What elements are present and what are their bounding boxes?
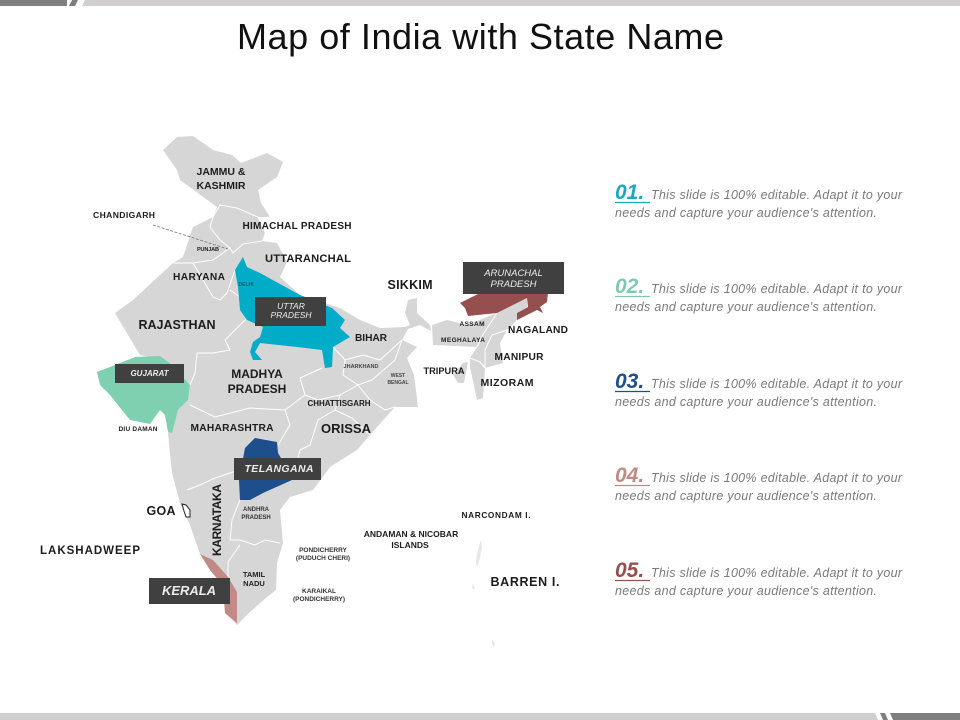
label: Diu Daman: DIU DAMAN [118,426,158,433]
map: Telangana highlighted [239,438,292,500]
label: Tripura: TRIPURA [424,366,465,376]
callout: Gujarat: GUJARAT [130,369,170,378]
text block 05: 05. [615,559,644,582]
Chandigarh leader line [153,225,228,249]
text block 05 [615,559,903,598]
label: Rajasthan: RAJASTHAN [138,318,216,332]
label: Jharkhand: JHARKHAND [344,364,379,370]
label: Karnataka: KARNATAKA [210,484,224,556]
text block 04 [615,464,903,503]
callout: Arunachal Pradesh: PRADESH [491,279,537,290]
label: Nagaland: NAGALAND [508,325,568,336]
label: West Bengal: BENGAL [387,380,409,386]
label: Sikkim: SIKKIM [388,278,432,292]
label: Narcondam Island: NARCONDAM I. [462,510,530,520]
label: Maharashtra: MAHARASHTRA [190,423,274,434]
text block 03 [615,370,903,409]
text block 03: This slide is 100% editable. Adapt it to your [651,377,903,391]
label: Andhra Pradesh: ANDHRA [243,507,270,513]
label: West Bengal: WEST [391,373,405,379]
text block 01: 01. [615,181,644,204]
text block 04: This slide is 100% editable. Adapt it to your [651,471,903,485]
text block 01 [615,181,903,220]
label: Chandigarh: CHANDIGARH [93,210,155,220]
label: Andaman and Nicobar Islands: ISLANDS [391,540,429,550]
text block 01: This slide is 100% editable. Adapt it to your [651,188,903,202]
label: Madhya Pradesh: MADHYA [231,367,283,381]
map: Arunachal Pradesh highlighted [460,293,548,320]
label: Madhya Pradesh: PRADESH [228,382,286,396]
text block 01: needs and capture your audience's attention. [615,206,877,220]
text block 03: 03. [615,370,644,393]
label: Goa: GOA [146,504,176,518]
map: Goa outline [182,504,190,517]
callout: Telangana [234,458,321,480]
label: Meghalaya: MEGHALAYA [441,337,485,344]
label: Karaikal: KARAIKAL [302,588,336,595]
bottom decorative bar [0,713,960,720]
map of India [97,136,548,647]
map: Gujarat highlighted [97,356,190,433]
text block 04: needs and capture your audience's attention. [615,489,877,503]
label: Tamil Nadu: TAMIL [243,570,266,579]
label: Jammu and Kashmir: JAMMU & [196,166,246,178]
label: Jammu and Kashmir: KASHMIR [196,180,246,192]
map: state borders [173,205,507,577]
map: Andaman and Nicobar islands [472,540,495,647]
text block 05: This slide is 100% editable. Adapt it to your [651,566,903,580]
top decorative bar [0,0,960,6]
label: Assam: ASSAM [460,321,484,328]
label: Barren Island: BARREN I. [490,575,560,589]
label: Karaikal: (PONDICHERRY) [293,596,345,603]
map: Uttar Pradesh highlighted [235,257,350,368]
label: Manipur: MANIPUR [494,352,544,363]
title: Map of India with State Name [237,16,724,57]
label: Pondicherry: PONDICHERRY [299,547,348,554]
text block 02: needs and capture your audience's attention. [615,300,877,314]
map: mainland states [115,136,431,625]
label: Pondicherry: (PUDUCH CHERI) [296,555,350,562]
text block 02: This slide is 100% editable. Adapt it to your [651,282,903,296]
callout: Kerala [149,578,230,604]
map: Tripura [453,362,468,383]
callout: Arunachal Pradesh: ARUNACHAL [483,268,543,279]
label: Tamil Nadu: NADU [243,579,265,588]
callout: Telangana: TELANGANA [244,463,314,475]
map: north-east states [432,298,527,400]
label: Punjab: PUNJAB [197,247,219,253]
callout: Gujarat [115,364,184,383]
label: Bihar: BIHAR [355,333,388,344]
label: Andhra Pradesh: PRADESH [241,515,271,521]
label: Delhi: DELHI [238,282,254,288]
label: Chhattisgarh: CHHATTISGARH [308,399,371,408]
text block 05: needs and capture your audience's attention. [615,584,877,598]
label: Himachal Pradesh: HIMACHAL PRADESH [242,221,352,232]
label: Andaman and Nicobar Islands: ANDAMAN & NICOBAR [364,529,458,539]
label: Uttaranchal: UTTARANCHAL [265,253,351,265]
label: Orissa: ORISSA [321,421,372,436]
text block 03: needs and capture your audience's attention. [615,395,877,409]
callout: Arunachal Pradesh [463,262,564,294]
text block 02: 02. [615,275,644,298]
callout: Uttar Pradesh [255,297,326,326]
text block 04: 04. [615,464,644,487]
callout: Kerala: KERALA [162,583,216,598]
label: Mizoram: MIZORAM [480,377,534,389]
label: Lakshadweep: LAKSHADWEEP [40,545,140,557]
callout: Uttar Pradesh: UTTAR [277,301,305,311]
label: Haryana: HARYANA [173,272,226,283]
text block 02 [615,275,903,314]
map: Kerala highlighted [200,554,237,623]
callout: Uttar Pradesh: PRADESH [270,310,312,320]
